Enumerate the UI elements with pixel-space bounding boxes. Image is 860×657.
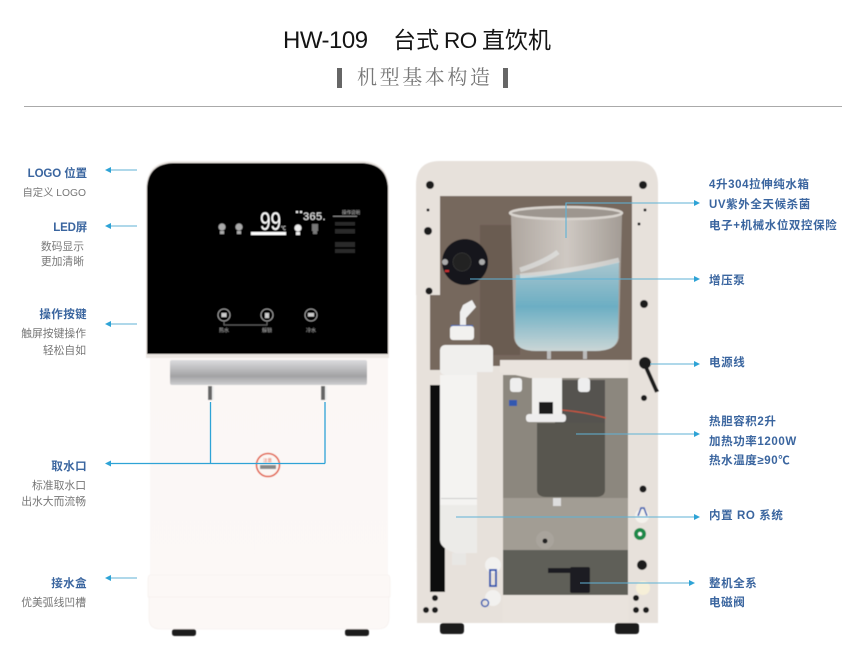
callout: LOGO — [22, 166, 137, 199]
title: HW-109 — [283, 27, 368, 54]
callout: buttons: 触屏按键操作 — [21, 326, 86, 340]
touch buttons: 热水 — [219, 327, 229, 334]
solenoid valve — [548, 567, 590, 593]
feet — [440, 623, 639, 634]
water tank — [510, 207, 622, 359]
callout: water outlet: 取水口 — [51, 459, 87, 473]
callout: LOGO: 自定义 LOGO — [22, 186, 86, 199]
callout: LED screen: 更加清晰 — [41, 255, 84, 268]
callout: drip tray: 优美弧线凹槽 — [21, 595, 86, 609]
divider — [24, 106, 842, 107]
touch buttons: 冷水 — [306, 327, 316, 334]
callout: heater: 加热功率1200W — [709, 434, 797, 448]
callout: LED screen — [41, 221, 137, 268]
callout: solenoid valve — [580, 576, 757, 609]
display: status icons — [218, 224, 318, 235]
lower compartment — [430, 375, 628, 596]
fittings and holes — [423, 181, 650, 613]
outer shell — [416, 161, 658, 623]
display: instructions text — [333, 209, 360, 253]
foot left and right — [172, 629, 369, 636]
callout: buttons: 轻松自如 — [43, 343, 86, 357]
display: temperature: 99 — [260, 208, 281, 236]
callout: buttons — [21, 307, 137, 357]
callout: water tank: 4升304拉伸纯水箱 — [709, 177, 810, 191]
valve assembly — [509, 378, 590, 422]
warning badge — [256, 454, 280, 476]
callout: power cord — [650, 355, 745, 369]
touch buttons — [218, 309, 317, 334]
callout: power cord: 电源线 — [709, 355, 745, 369]
warning badge: 注意 — [263, 457, 272, 464]
callout: solenoid valve: 整机全系 — [709, 576, 757, 590]
upper tinted window — [440, 196, 632, 366]
callout: water outlet: 标准取水口 — [32, 478, 86, 492]
display: temperature: ℃ — [281, 226, 286, 232]
callout: water tank — [566, 177, 837, 238]
nozzles — [208, 386, 327, 400]
callout: RO system: 内置 RO 系统 — [709, 508, 783, 522]
front body — [150, 352, 388, 575]
callout: LED screen: LED屏 — [53, 221, 87, 234]
callout: solenoid valve: 电磁阀 — [709, 595, 745, 609]
panel: machine interior view — [416, 161, 658, 634]
callout: booster pump — [470, 273, 745, 287]
callout: booster pump: 增压泵 — [709, 273, 745, 287]
power cord — [639, 357, 657, 392]
silver faucet bar — [170, 360, 367, 385]
subtitle with side bars: 机型基本构造 — [357, 61, 493, 90]
touch buttons: 解锁 — [262, 327, 272, 334]
title: 台式 — [393, 27, 439, 53]
white bracket panel — [447, 360, 628, 622]
shell corner and side columns — [416, 196, 658, 623]
callout: water outlet: 出水大而流畅 — [21, 494, 86, 508]
callout: RO system — [456, 508, 783, 522]
drip tray — [148, 575, 390, 629]
hot water heater — [537, 380, 606, 506]
callout: buttons: 操作按键 — [39, 307, 87, 321]
callout: heater — [576, 414, 797, 467]
display: instructions text: 操作说明 — [342, 209, 360, 216]
RO filter — [440, 300, 493, 565]
panel: machine front view — [146, 161, 390, 636]
callout: heater: 热水温度≥90℃ — [709, 453, 790, 467]
callout: heater: 热胆容积2升 — [709, 414, 776, 428]
title: RO — [444, 28, 477, 53]
callout: water outlet — [21, 402, 325, 508]
callout: LED screen: 数码显示 — [41, 240, 84, 253]
callout: drip tray — [21, 575, 137, 609]
booster pump — [442, 239, 488, 285]
callout: drip tray: 接水盒 — [51, 576, 87, 590]
title: 直饮机 — [482, 27, 551, 53]
callout: water tank: 电子+机械水位双控保险 — [709, 218, 837, 232]
LCD black panel — [146, 161, 389, 358]
callout: LOGO: LOGO 位置 — [28, 166, 87, 180]
display: day counter: 365. — [303, 211, 326, 223]
callout: water tank: UV紫外全天候杀菌 — [709, 197, 811, 211]
